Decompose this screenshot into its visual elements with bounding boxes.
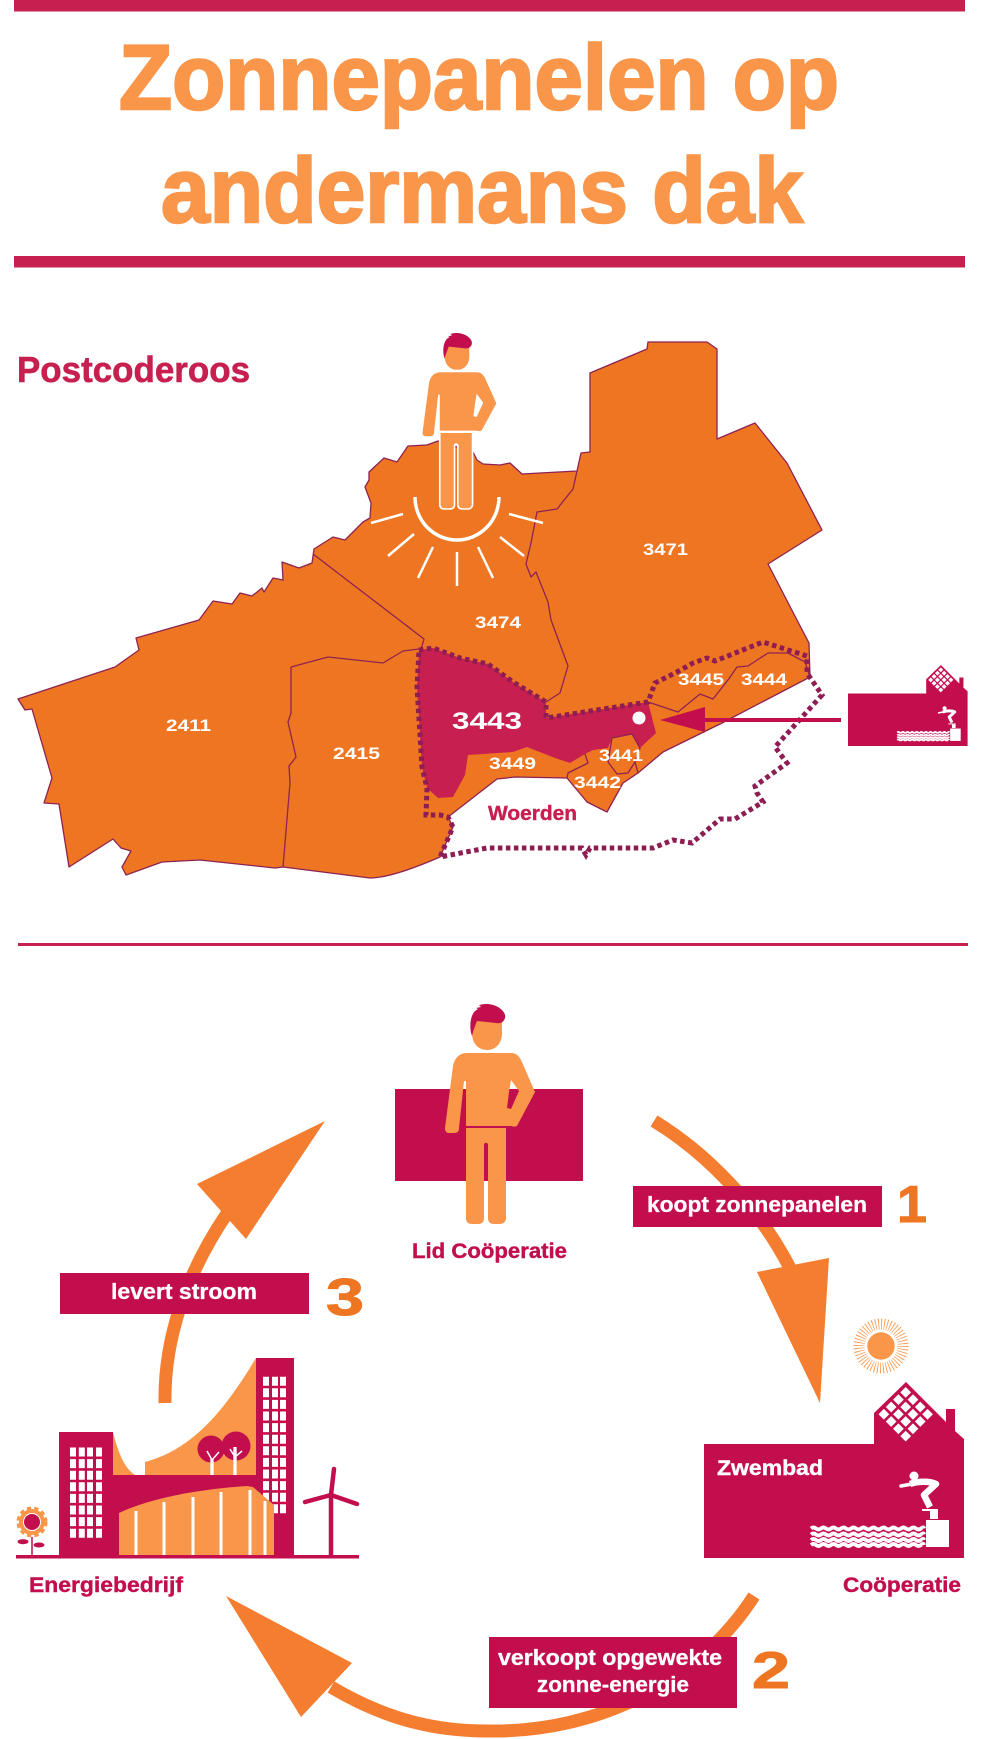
pool building panel	[704, 1382, 964, 1558]
postcode labels: 3445	[678, 671, 724, 689]
label: Lid Coöperatie: Lid Coöperatie	[412, 1240, 567, 1263]
trees	[198, 1432, 250, 1475]
title: andermans dak	[161, 140, 804, 242]
icon: small swimming pool building	[848, 665, 968, 746]
label: Energiebedrijf: Energiebedrijf	[29, 1574, 184, 1597]
postcode labels: 3441	[599, 747, 643, 765]
icon: person	[445, 1004, 535, 1224]
divider	[18, 943, 968, 946]
title	[119, 27, 839, 242]
label: Zwembad: Zwembad	[717, 1457, 823, 1480]
postcode labels: 3443	[452, 708, 522, 735]
bottom title bar	[14, 256, 965, 268]
main hall	[119, 1486, 274, 1555]
step 1 label: koopt zonnepanelen	[647, 1192, 867, 1217]
step 3 label: levert stroom	[111, 1279, 257, 1304]
postcode labels: 2411	[166, 717, 211, 735]
postcode labels: 3442	[574, 774, 621, 792]
postcode labels: 3471	[643, 541, 688, 559]
arrow 2	[226, 1596, 754, 1731]
icon: sunflower	[18, 1509, 45, 1556]
heading: Postcoderoos: Postcoderoos	[17, 349, 250, 390]
arrow: building to location on map	[660, 707, 841, 732]
icon: sun	[859, 1324, 903, 1368]
dotted municipal boundary	[417, 642, 822, 857]
step 3 label	[60, 1273, 309, 1314]
energy company illustration	[16, 1358, 359, 1597]
region borders	[283, 471, 810, 867]
icon: sun rays on map	[371, 497, 543, 586]
location dot	[632, 712, 646, 724]
postcode labels: 3474	[475, 614, 522, 632]
postcode labels: 3449	[489, 755, 536, 773]
region 3443 highlighted	[417, 648, 656, 798]
postcode labels: 3444	[741, 671, 788, 689]
step 2 label	[489, 1637, 737, 1708]
arrow 1	[654, 1121, 829, 1403]
top title bar	[14, 0, 965, 12]
label: Woerden: Woerden	[488, 802, 577, 825]
postcode labels: 2415	[333, 745, 380, 763]
icon: wind turbine	[305, 1469, 357, 1555]
member figure panel	[395, 1004, 583, 1263]
map regions	[18, 342, 822, 878]
step 2 label: verkoopt opgewekte	[498, 1645, 722, 1670]
number 1: 1	[897, 1176, 927, 1234]
orange backdrop shapes	[113, 1358, 256, 1476]
postcode labels	[166, 541, 788, 792]
buildings	[59, 1358, 294, 1557]
label: Coöperatie: Coöperatie	[843, 1574, 961, 1597]
step 1 label	[633, 1186, 882, 1227]
number 3: 3	[326, 1269, 364, 1327]
number 2: 2	[752, 1642, 790, 1700]
windows	[73, 1377, 283, 1539]
backdrop rectangle	[395, 1089, 583, 1181]
step 2 label: zonne-energie	[537, 1672, 689, 1697]
postcode map	[18, 342, 822, 878]
ground line	[16, 1555, 359, 1558]
title: Zonnepanelen op	[119, 27, 839, 129]
arrow 3	[165, 1121, 325, 1403]
icon: person standing on map	[423, 333, 496, 509]
